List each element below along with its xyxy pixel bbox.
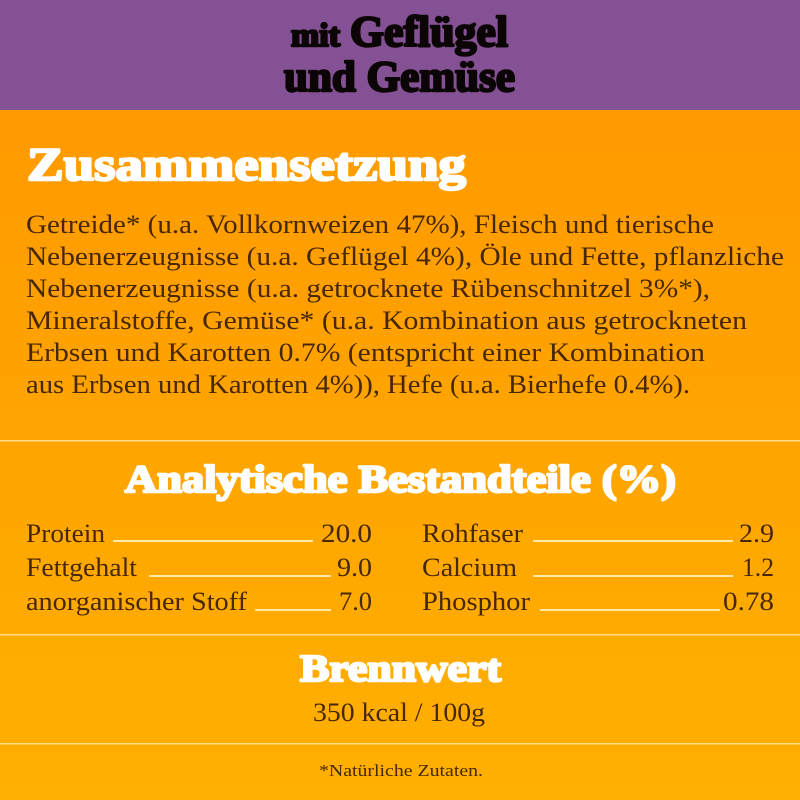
row: Fettgehalt <box>26 553 372 582</box>
header band <box>0 0 800 110</box>
header title <box>284 9 515 101</box>
row: Phosphor: Phosphor <box>422 587 530 616</box>
panel: Analytische Bestandteile <box>26 458 774 616</box>
energy value: 350 kcal / 100g <box>313 698 485 727</box>
ingredients text block <box>26 210 784 399</box>
row: Fettgehalt: 9.0 <box>337 553 372 582</box>
row: Phosphor: 0.78 <box>723 587 774 616</box>
heading: Brennwert: Brennwert <box>300 648 501 690</box>
ingredients text block: Erbsen und Karotten 0.7% (entspricht einer Kombination <box>26 338 705 367</box>
footnote: *Natürliche Zutaten. <box>319 761 483 780</box>
row: Rohfaser <box>422 519 774 548</box>
ingredients text block: Nebenerzeugnisse (u.a. Geflügel 4%), Öle und Fette, pflanzliche <box>26 242 784 271</box>
row: Phosphor <box>422 587 774 616</box>
header title: Geflügel <box>350 9 508 56</box>
header title: und Gemüse <box>284 54 515 101</box>
row: Rohfaser: 2.9 <box>739 519 774 548</box>
panel: Brennwert <box>300 648 501 727</box>
ingredients text block: Getreide* (u.a. Vollkornweizen 47%), Fleisch und tierische <box>26 210 714 239</box>
row: Calcium <box>422 553 774 582</box>
left nutrient column <box>26 519 372 616</box>
row: Rohfaser: Rohfaser <box>422 519 523 548</box>
ingredients text block: Nebenerzeugnisse (u.a. getrocknete Rübenschnitzel 3%*), <box>26 274 710 303</box>
ingredients text block: Mineralstoffe, Gemüse* (u.a. Kombination aus getrockneten <box>26 306 747 335</box>
row: anorganischer Stoff: anorganischer Stoff <box>26 587 247 616</box>
panel: Zusammensetzung <box>26 139 784 399</box>
row: Fettgehalt: Fettgehalt <box>26 553 138 582</box>
row: Protein: 20.0 <box>321 519 372 548</box>
row: Protein: Protein <box>26 519 105 548</box>
row: Calcium: Calcium <box>422 553 517 582</box>
right nutrient column <box>422 519 774 616</box>
row: anorganischer Stoff: 7.0 <box>339 587 372 616</box>
row: Protein <box>26 519 372 548</box>
header title: mit <box>291 18 340 54</box>
ingredients text block: aus Erbsen und Karotten 4%)), Hefe (u.a. Bierhefe 0.4%). <box>26 370 690 399</box>
row: Calcium: 1.2 <box>742 553 774 582</box>
heading: Zusammensetzung: Zusammensetzung <box>27 139 467 191</box>
heading: Analytische Bestandteile: Analytische Bestandteile (%) <box>125 458 676 501</box>
row: anorganischer Stoff <box>26 587 372 616</box>
